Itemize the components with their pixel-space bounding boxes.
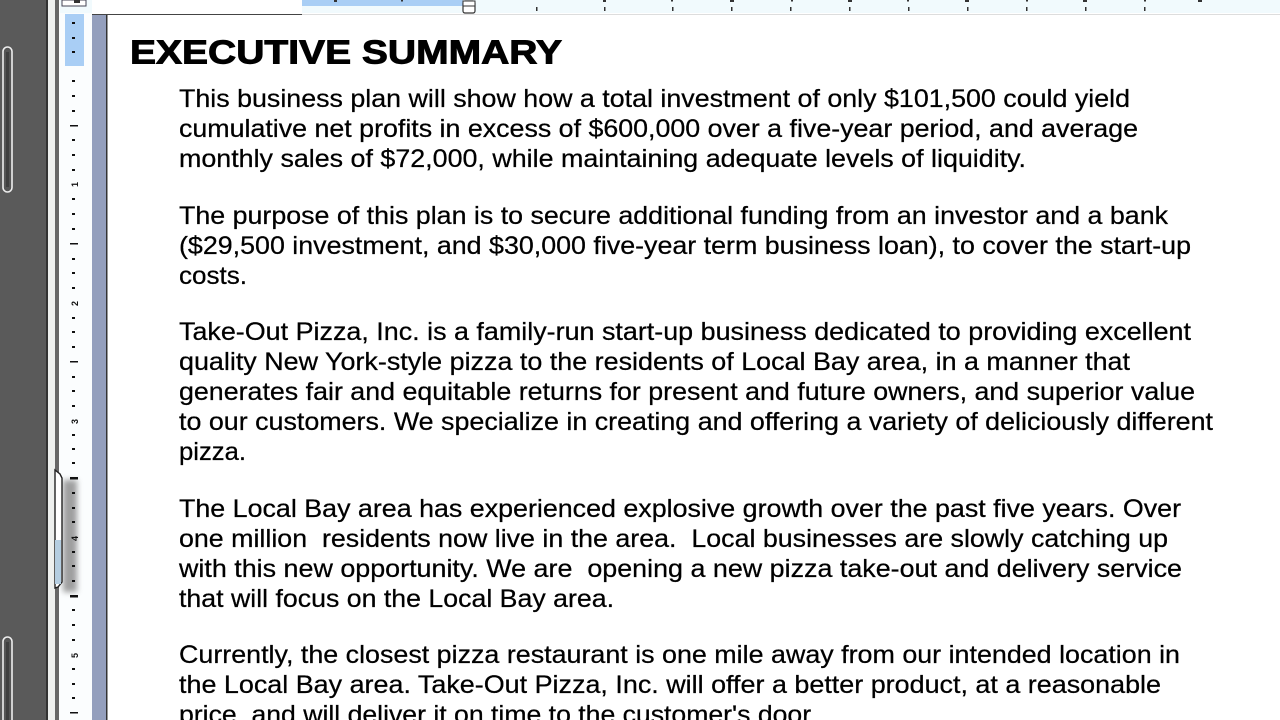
paragraph: competition: the Local Bay area. Take-Out Pizza, Inc. will offer a better product, at a reasonable	[179, 671, 1161, 699]
paragraph: purpose of plan: ($29,500 investment, and $30,000 five-year term business loan), to cover the start-up	[179, 232, 1191, 260]
paragraph: local market growth: with this new opportunity. We are opening a new pizza take-out and delivery service	[178, 555, 1182, 583]
paragraph: investment overview: monthly sales of $72,000, while maintaining adequate levels of liquidity.	[179, 145, 1026, 173]
paragraph: company description: quality New York-style pizza to the residents of Local Bay area, in a manner that	[179, 348, 1130, 376]
vertical ruler	[59, 0, 92, 720]
paragraph: investment overview: This business plan will show how a total investment of only $101,500 could yield	[179, 85, 1130, 113]
paragraph: competition: Currently, the closest pizza restaurant is one mile away from our intended location in	[179, 641, 1180, 669]
paragraph: local market growth: one million residents now live in the area. Local businesses are slowly catching up	[179, 525, 1168, 553]
vertical ruler numbers: 5	[70, 653, 80, 658]
vertical ruler numbers: 1	[70, 182, 80, 187]
scroll handle on ruler	[55, 470, 62, 588]
paragraph: company description: generates fair and equitable returns for present and future owners, and superior value	[179, 378, 1195, 406]
vertical ruler numbers	[70, 182, 80, 658]
paragraph: local market growth	[178, 495, 1182, 613]
dark application side panel	[0, 0, 59, 720]
paragraph: company description	[179, 318, 1213, 466]
paragraph: investment overview: cumulative net profits in excess of $600,000 over a five-year period, and average	[179, 115, 1138, 143]
paragraph: purpose of plan: costs.	[179, 262, 247, 290]
paragraph: company description: pizza.	[179, 438, 246, 466]
paragraph: investment overview	[179, 85, 1138, 173]
paragraph: company description: to our customers. We specialize in creating and offering a variety of deliciously different	[179, 408, 1213, 436]
paragraph: competition	[179, 641, 1180, 720]
paragraph: local market growth: The Local Bay area has experienced explosive growth over the past five years. Over	[179, 495, 1181, 523]
vertical ruler numbers: 3	[70, 419, 80, 424]
paragraph: purpose of plan: The purpose of this plan is to secure additional funding from an investor and a bank	[179, 202, 1169, 230]
vertical ruler numbers: 2	[70, 301, 80, 306]
paragraph: local market growth: that will focus on the Local Bay area.	[179, 585, 614, 613]
vertical ruler numbers: 4	[70, 536, 80, 541]
horizontal ruler	[60, 0, 1280, 15]
paragraph: purpose of plan	[179, 202, 1191, 290]
title: EXECUTIVE SUMMARY	[130, 34, 562, 71]
paragraph: company description: Take-Out Pizza, Inc. is a family-run start-up business dedicated to providing excellent	[179, 318, 1191, 346]
